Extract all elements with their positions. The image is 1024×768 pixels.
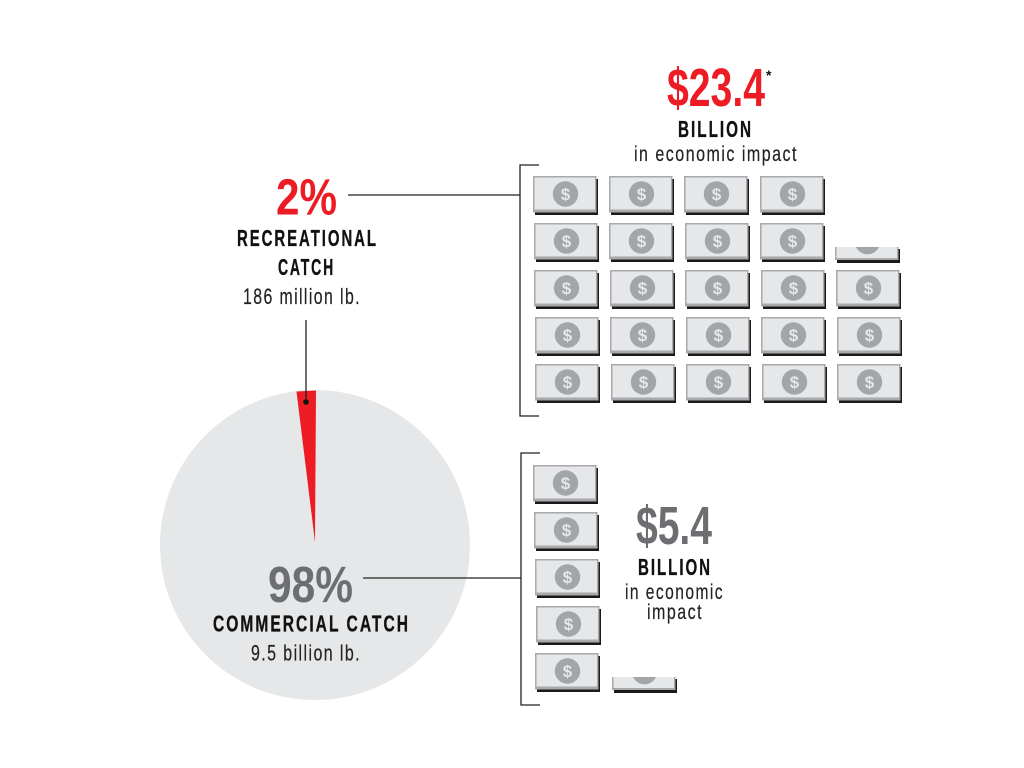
bill stack: recreational $23.4 billion: $ bbox=[788, 232, 798, 251]
bill stack: recreational $23.4 billion: $ bbox=[865, 326, 875, 345]
bill stack: recreational $23.4 billion: $ bbox=[563, 326, 573, 345]
bill stack: recreational $23.4 billion: $ bbox=[789, 279, 799, 298]
amount: 9.5 billion lb: 9.5 billion lb. bbox=[251, 640, 361, 666]
stat: $23.4: $23.4 bbox=[667, 58, 765, 118]
bill stack: recreational $23.4 billion: $ bbox=[563, 373, 573, 392]
bill stack: recreational $23.4 billion: $ bbox=[712, 185, 722, 204]
pie chart bbox=[160, 390, 470, 700]
bill stack: recreational $23.4 billion: $ bbox=[561, 185, 571, 204]
bill stack: recreational $23.4 billion: $ bbox=[790, 373, 800, 392]
stat: 98%: 98% bbox=[268, 556, 353, 613]
bill stack: recreational $23.4 billion: $ bbox=[788, 185, 798, 204]
caption: impact: impact bbox=[647, 600, 703, 624]
label: catch: CATCH bbox=[278, 254, 335, 280]
bill stack: commercial $5.4 billion: $ bbox=[563, 662, 573, 681]
stat: $5.4: $5.4 bbox=[636, 496, 712, 556]
bill stack: recreational $23.4 billion: $ bbox=[713, 279, 723, 298]
bill stack: recreational $23.4 billion: $ bbox=[714, 326, 724, 345]
bracket: commercial bills bbox=[521, 453, 540, 705]
bill stack: commercial $5.4 billion: $ bbox=[564, 615, 574, 634]
bill stack: recreational $23.4 billion: $ bbox=[639, 373, 649, 392]
leader line: recreational to wedge bbox=[303, 320, 309, 405]
bill stack: recreational $23.4 billion: $ bbox=[562, 232, 572, 251]
pie: commercial share bbox=[160, 390, 470, 700]
bill stack: commercial $5.4 billion: $ bbox=[562, 521, 572, 540]
caption: in economic: in economic bbox=[625, 580, 724, 604]
bill stack: recreational $23.4 billion: $ bbox=[714, 373, 724, 392]
bill stack: commercial $5.4 billion: $ bbox=[561, 474, 571, 493]
label: recreational: RECREATIONAL bbox=[237, 225, 378, 251]
bill stack: recreational $23.4 billion: $ bbox=[865, 373, 875, 392]
bill stack: recreational $23.4 billion: $ bbox=[637, 185, 647, 204]
bill stack: recreational $23.4 billion: $ bbox=[637, 232, 647, 251]
bill stack: recreational $23.4 billion: $ bbox=[562, 279, 572, 298]
bill stack: commercial $5.4 billion bbox=[533, 465, 677, 693]
bill stack: recreational $23.4 billion bbox=[533, 176, 902, 403]
text block: $23.4 billion bbox=[634, 58, 798, 166]
connector: 98% to lower bracket bbox=[363, 577, 521, 579]
bill stack: recreational $23.4 billion: $ bbox=[638, 326, 648, 345]
asterisk: * bbox=[766, 67, 772, 83]
bill stack: recreational $23.4 billion: $ bbox=[789, 326, 799, 345]
bill stack: recreational $23.4 billion: $ bbox=[864, 279, 874, 298]
label: billion: BILLION bbox=[678, 116, 753, 142]
connector: 2% to upper bracket bbox=[348, 194, 520, 196]
label: commercial catch: COMMERCIAL CATCH bbox=[213, 610, 410, 636]
bill stack: commercial $5.4 billion: $ bbox=[563, 568, 573, 587]
bill stack: recreational $23.4 billion: $ bbox=[713, 232, 723, 251]
stat: 2%: 2% bbox=[276, 168, 337, 226]
bill stack: recreational $23.4 billion: $ bbox=[638, 279, 648, 298]
text block: recreational catch bbox=[237, 168, 378, 309]
bracket: recreational bills bbox=[520, 165, 539, 416]
text block: commercial catch bbox=[213, 556, 410, 666]
caption: in economic impact: in economic impact bbox=[634, 142, 798, 166]
amount: 186 million lb: 186 million lb. bbox=[243, 284, 361, 309]
label: billion: BILLION bbox=[638, 554, 712, 580]
pie: recreational wedge bbox=[296, 390, 316, 542]
text block: $5.4 billion bbox=[625, 496, 724, 624]
